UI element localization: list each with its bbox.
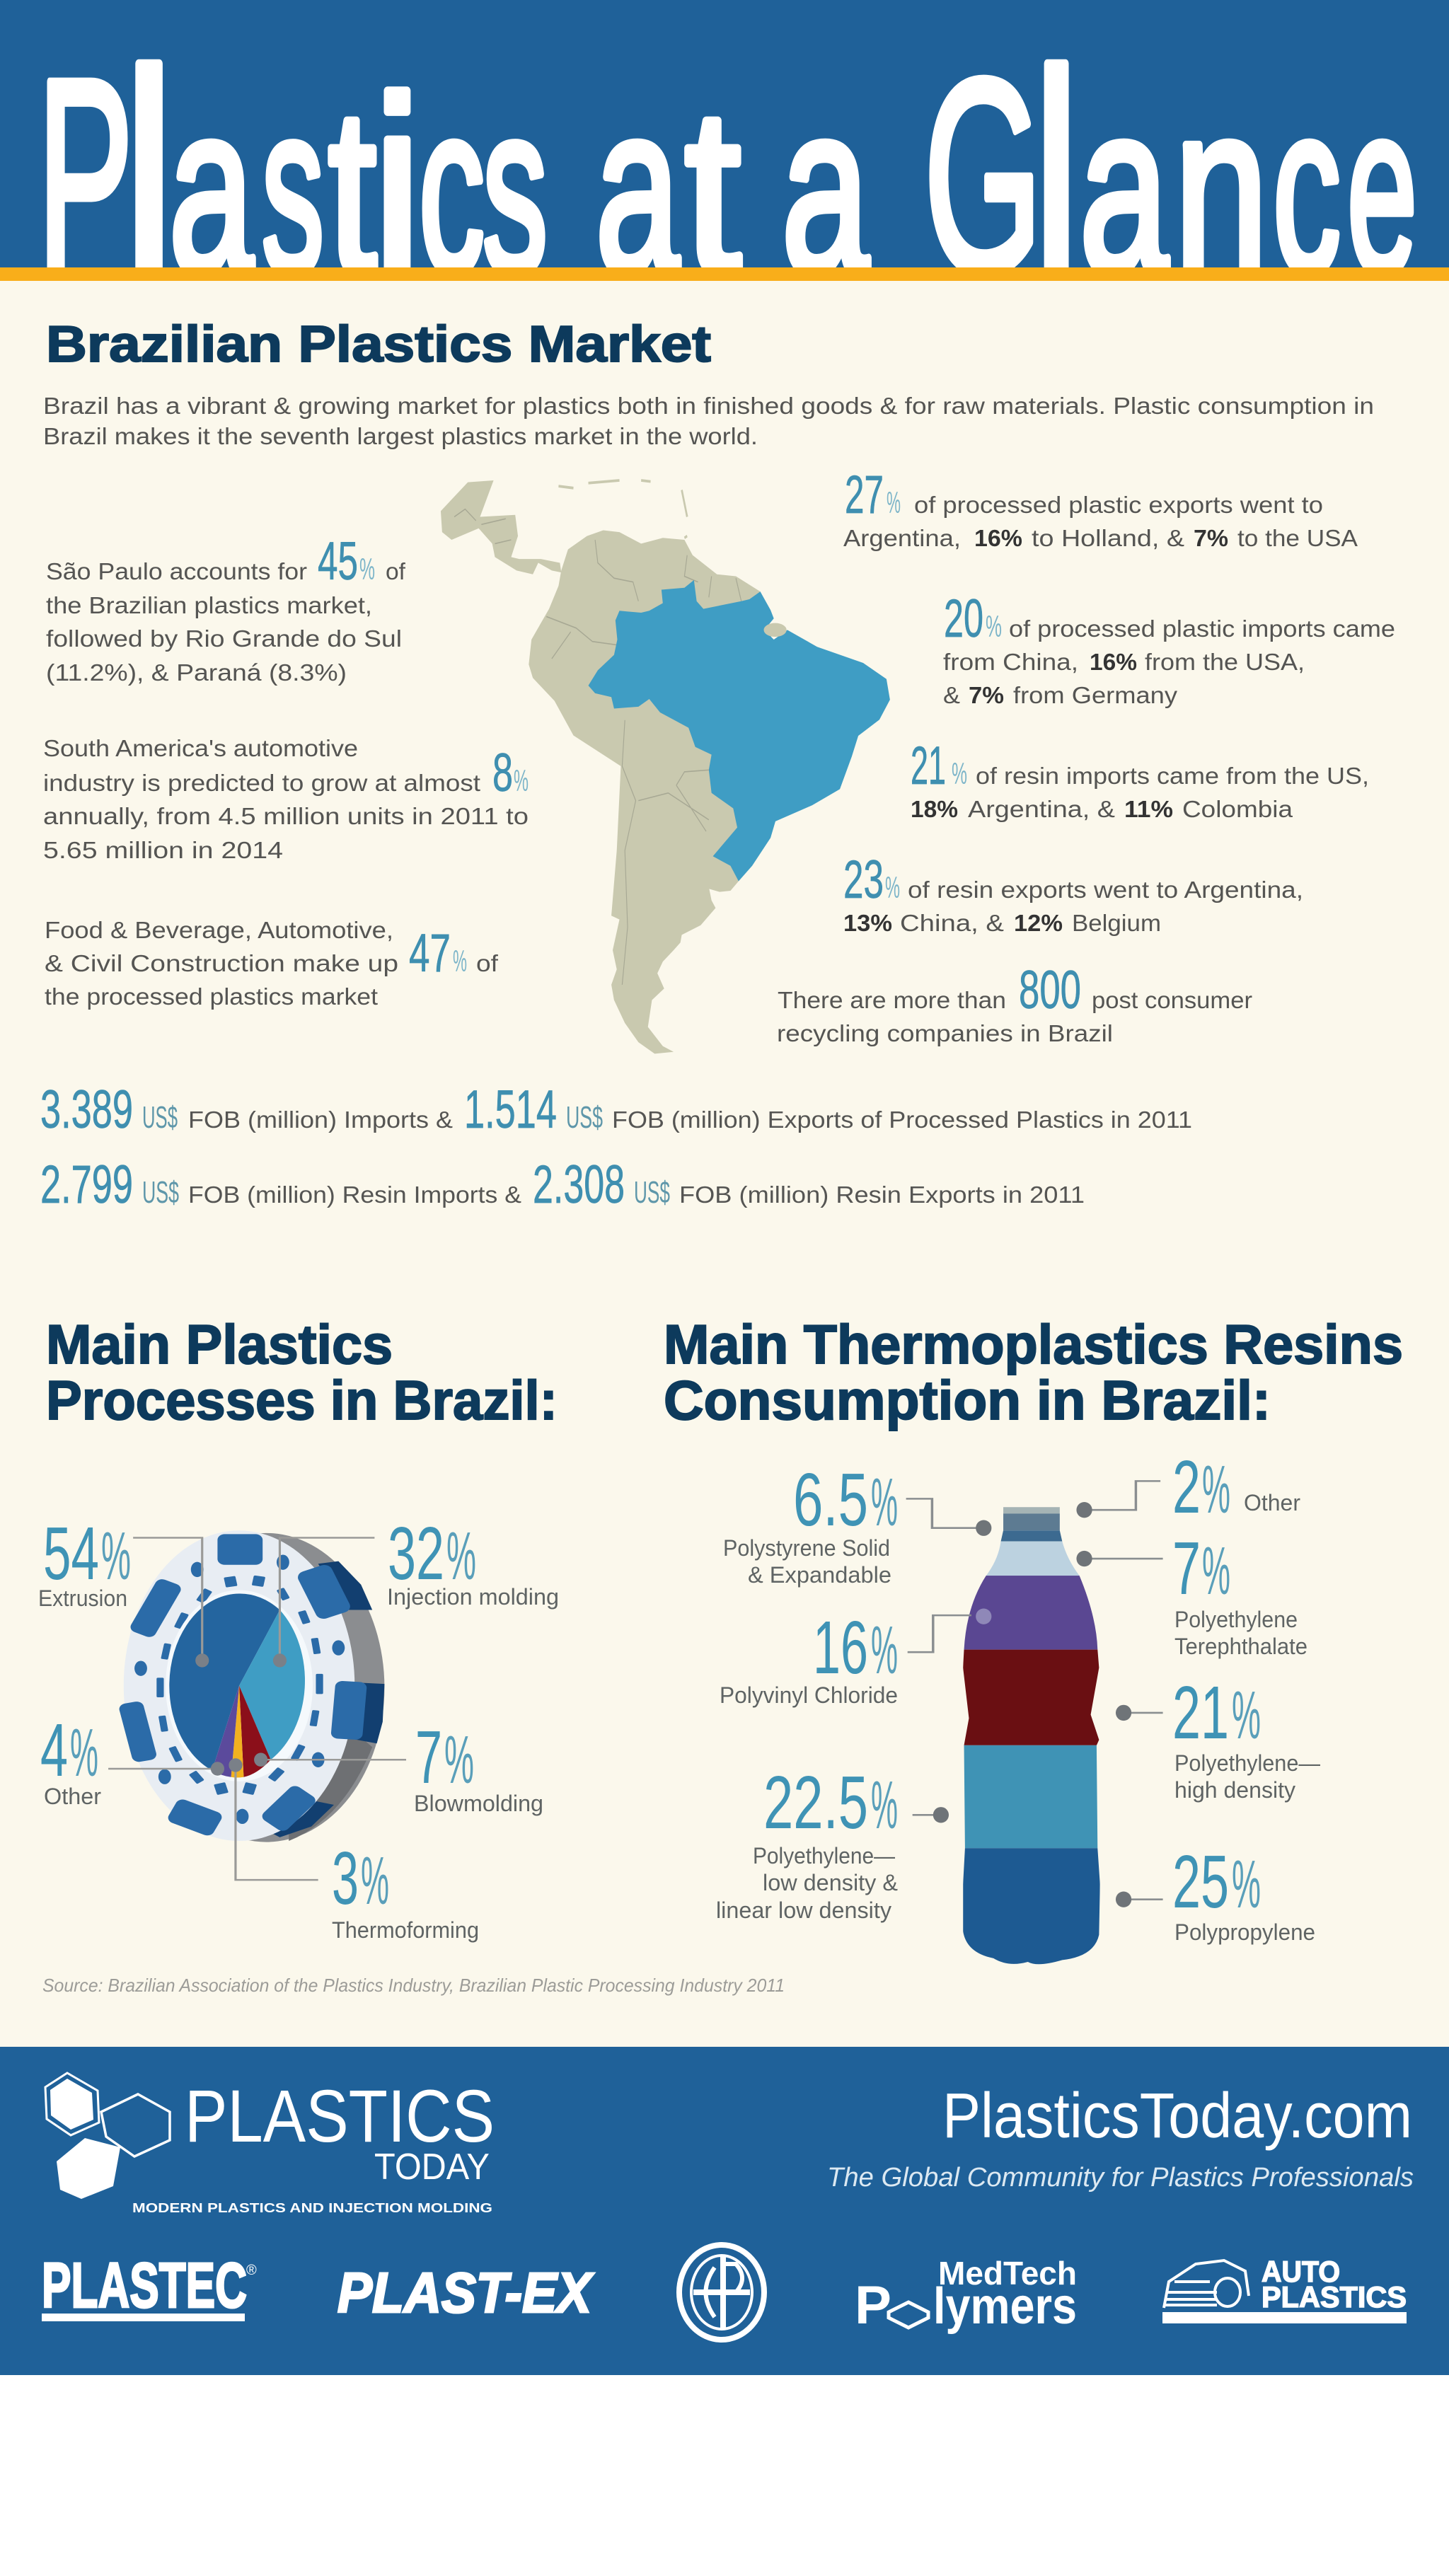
stat: food and beverage 47%: & Civil Construction make up — [45, 950, 398, 976]
logo: MedTech Polymers: lymers — [933, 2278, 1077, 2335]
chip dots — [134, 1554, 345, 1824]
label: 25% polypropylene: Polypropylene — [1174, 1919, 1315, 1945]
chip dashes — [156, 1576, 323, 1795]
label: 3% Thermoforming: % — [361, 1843, 389, 1919]
header band — [0, 0, 1449, 272]
label: 21% HDPE: high density — [1174, 1777, 1295, 1803]
cream page panel — [0, 276, 1449, 2052]
label: 3% Thermoforming — [332, 1837, 479, 1943]
stat: resin imports 21% — [911, 736, 1369, 822]
FOB line: resin: 2.799 — [40, 1155, 133, 1215]
logo: Plastics Today: MODERN PLASTICS AND INJECTION MOLDING — [132, 2201, 492, 2215]
logo hexagons — [45, 2073, 170, 2199]
logo wordmark: PLASTICS — [185, 2075, 495, 2158]
stat: exports 27%: % — [887, 486, 901, 520]
stat: imports 20%: 16% — [1090, 649, 1137, 675]
stat: resin imports 21%: Colombia — [1182, 796, 1293, 822]
chip rim segments — [266, 1561, 384, 1837]
stat: resin imports 21%: 11% — [1124, 796, 1173, 822]
label: 54% Extrusion: Extrusion — [38, 1586, 127, 1611]
heading: Main Thermoplastics Resins Consumption in Brazil: Consumption in Brazil: — [664, 1369, 1271, 1431]
stat: imports 20%: % — [986, 610, 1002, 644]
intro paragraph: Brazil makes it the seventh largest plastics market in the world. — [43, 423, 758, 449]
stat: food and beverage 47%: of — [476, 950, 499, 976]
chip blocks — [118, 1534, 367, 1837]
bottle segment: PET 7% — [986, 1541, 1080, 1576]
title: t — [685, 60, 741, 321]
pie: thermoforming 3% — [231, 1686, 243, 1777]
stat: food and beverage 47%: Food & Beverage, Automotive, — [45, 917, 393, 943]
label: 7% Blowmolding — [414, 1716, 543, 1816]
FOB line: resin: FOB (million) Resin Imports & — [188, 1182, 521, 1208]
label: 16% polyvinyl chloride: Polyvinyl Chloride — [720, 1682, 898, 1708]
label: 25% polypropylene — [1172, 1840, 1315, 1945]
stat: resin imports 21%: % — [952, 757, 967, 791]
title: n — [1174, 54, 1268, 323]
label: 21% HDPE: 21 — [1172, 1671, 1229, 1755]
title: G — [924, 22, 1042, 330]
logo: MedTech Polymers: P — [855, 2275, 891, 2335]
stat: 800 recycling companies: post consumer — [1092, 987, 1252, 1013]
logo: Auto Plastics: PLASTICS — [1262, 2280, 1407, 2314]
stat: resin imports 21%: 21 — [911, 736, 946, 796]
footer band — [0, 2047, 1449, 2375]
map: borders — [454, 509, 741, 985]
chip rim dark edge — [289, 1726, 372, 1841]
tagline: The Global Community for Plastics Professionals — [827, 2163, 1414, 2193]
title: a — [596, 54, 680, 323]
text: % — [101, 1518, 131, 1594]
logo: Plastics Today — [45, 2073, 495, 2215]
label: 6.5% polystyrene: Polystyrene Solid — [723, 1535, 890, 1561]
pie: injection molding 32% — [239, 1610, 305, 1760]
label: 54% Extrusion: 54 — [43, 1512, 99, 1595]
bottle leader lines — [906, 1481, 1163, 1900]
stat: imports 20%: 20 — [944, 589, 983, 649]
label: 16% polyvinyl chloride: 16 — [813, 1606, 868, 1690]
label: 25% polypropylene: 25 — [1172, 1840, 1229, 1924]
stat: imports 20%: & — [943, 682, 960, 708]
title: l — [1033, 12, 1080, 333]
logo: Plastec: ® — [246, 2263, 257, 2278]
stat: Sao Paulo 45%: of — [386, 558, 406, 584]
stat: automotive 8%: South America's automotive — [43, 735, 358, 761]
bottle cap — [1003, 1507, 1060, 1514]
bottle segment: HDPE 21% — [963, 1650, 1099, 1745]
stat: 800 recycling companies: recycling companies in Brazil — [777, 1020, 1113, 1046]
stat: resin exports 23%: % — [885, 871, 900, 905]
label: 4% Other — [40, 1709, 101, 1809]
title: a — [169, 54, 254, 323]
intro paragraph — [43, 393, 1374, 449]
heading: Brazilian Plastics Market: Brazilian Plastics Market — [46, 316, 711, 373]
title: a — [782, 54, 870, 323]
stat: automotive 8% — [43, 735, 529, 863]
title: i — [373, 45, 422, 325]
label: 2% other: 2 — [1172, 1445, 1201, 1529]
stat: imports 20%: from Germany — [1013, 682, 1178, 708]
text: % — [871, 1612, 898, 1688]
logo: Plastec: PLASTEC — [42, 2251, 247, 2321]
leader lines — [108, 1537, 406, 1880]
bottle leader dots — [933, 1502, 1131, 1907]
title: P — [37, 22, 133, 330]
label: 32% Injection molding: 32 — [388, 1512, 444, 1595]
stat: resin imports 21%: Argentina, & — [968, 796, 1115, 822]
stat: Sao Paulo 45%: % — [359, 553, 375, 587]
heading: Main Thermoplastics Resins Consumption in Brazil — [664, 1313, 1403, 1431]
logo: Plastics Today: TODAY — [374, 2147, 490, 2188]
intro paragraph: Brazil has a vibrant & growing market for plastics both in finished goods & for raw materials. Plastic consumption in — [43, 393, 1374, 419]
title: s — [483, 54, 548, 323]
FOB line: resin: US$ — [634, 1175, 670, 1210]
stat: Sao Paulo 45%: the Brazilian plastics market, — [46, 592, 372, 618]
label: 7% Blowmolding: % — [444, 1722, 474, 1798]
stat: exports 27%: 7% — [1194, 525, 1228, 551]
stat: food and beverage 47%: 47 — [409, 923, 451, 983]
FOB line: processed plastics: 3.389 — [40, 1080, 133, 1140]
FOB line: resin — [40, 1155, 1085, 1215]
label: 7% PET: 7 — [1172, 1527, 1201, 1610]
label: 32% Injection molding: Injection molding — [387, 1584, 559, 1610]
stat: resin exports 23%: Belgium — [1072, 910, 1161, 936]
label: 2% other: % — [1202, 1452, 1230, 1527]
text: % — [871, 1767, 898, 1843]
stat: resin exports 23% — [843, 850, 1303, 936]
label: 16% polyvinyl chloride — [720, 1606, 898, 1708]
heading: Main Plastics Processes in Brazil: Processes in Brazil: — [46, 1369, 558, 1431]
stat: Sao Paulo 45% — [46, 531, 406, 686]
FOB line: resin: US$ — [142, 1175, 179, 1210]
label: 4% Other: % — [70, 1715, 98, 1791]
stat: imports 20%: 7% — [969, 682, 1004, 708]
stat: automotive 8%: 8 — [492, 743, 513, 803]
title: c — [419, 54, 485, 323]
orange rule — [0, 267, 1449, 281]
label: 32% Injection molding: % — [446, 1518, 476, 1594]
stat: imports 20% — [943, 589, 1395, 708]
FOB line: processed plastics: FOB (million) Imports & — [188, 1107, 453, 1133]
label: 6.5% polystyrene — [723, 1458, 898, 1588]
stat: imports 20%: from China, — [943, 649, 1078, 675]
bottle segment: polyvinyl chloride 16% — [964, 1576, 1098, 1650]
stat: exports 27%: 27 — [845, 465, 884, 525]
map: Brazil — [589, 580, 890, 881]
stat: imports 20%: of processed plastic imports came — [1009, 616, 1395, 642]
label: 7% PET: Polyethylene — [1174, 1607, 1298, 1632]
FOB line: resin: 2.308 — [533, 1155, 625, 1215]
stat: Sao Paulo 45%: followed by Rio Grande do Sul — [46, 625, 402, 652]
stat: automotive 8%: % — [514, 764, 529, 798]
chart: poker-chip pie of processes — [108, 1530, 406, 1880]
label: 7% Blowmolding: Blowmolding — [414, 1791, 543, 1816]
stat: automotive 8%: annually, from 4.5 million units in 2011 to — [43, 803, 529, 829]
label: 22.5% LDPE — [716, 1761, 898, 1923]
label: 7% PET: Terephthalate — [1174, 1634, 1307, 1659]
label: 4% Other: 4 — [40, 1709, 68, 1792]
stat: Sao Paulo 45%: (11.2%), & Paraná (8.3%) — [46, 659, 347, 686]
leader dots — [195, 1653, 287, 1776]
label: 22.5% LDPE: low density & — [763, 1870, 898, 1895]
stat: resin exports 23%: China, & — [900, 910, 1004, 936]
map: Marajo island — [764, 623, 787, 637]
stat: resin exports 23%: 13% — [843, 910, 892, 936]
chip face — [124, 1530, 354, 1841]
label: 21% HDPE: % — [1232, 1677, 1261, 1753]
text: % — [871, 1465, 898, 1540]
stat: resin exports 23%: 23 — [843, 850, 884, 910]
bottle segment: polypropylene 25% — [963, 1848, 1100, 1964]
title: a — [1080, 54, 1169, 323]
FOB line: processed plastics: US$ — [566, 1100, 603, 1135]
label: 2% other: Other — [1244, 1490, 1300, 1515]
FOB line: processed plastics: US$ — [142, 1100, 178, 1135]
label: 7% PET: % — [1202, 1533, 1230, 1609]
stat: automotive 8%: 5.65 million in 2014 — [43, 837, 283, 863]
label: 22.5% LDPE: linear low density — [716, 1898, 891, 1923]
logo: MedTech Polymers: MedTech — [938, 2255, 1077, 2292]
stat: exports 27%: Argentina, — [843, 525, 961, 551]
title — [37, 12, 1417, 333]
stat: food and beverage 47%: the processed plastics market — [45, 983, 378, 1010]
label: 22.5% LDPE: 22.5 — [763, 1761, 868, 1844]
logo: Auto Plastics — [1162, 2255, 1407, 2323]
source note: Source: Brazilian Association of the Plastics Industry, Brazilian Plastic Processing Industry 2011 — [42, 1975, 785, 1996]
map: South America with Brazil highlighted — [441, 480, 890, 1053]
pie: blowmolding 7% — [239, 1686, 271, 1777]
hexagon letter o — [889, 2302, 928, 2328]
stat: resin imports 21%: 18% — [911, 796, 958, 822]
stat: Sao Paulo 45%: São Paulo accounts for — [46, 558, 307, 584]
pie halo — [166, 1590, 313, 1781]
auto plastics wordmark: AUTO — [1262, 2255, 1340, 2288]
stat: food and beverage 47%: % — [453, 945, 467, 978]
heading: Main Plastics Processes in Brazil — [46, 1313, 558, 1431]
stat: exports 27% — [843, 465, 1358, 551]
chip rim — [148, 1533, 384, 1842]
heading: Main Thermoplastics Resins Consumption in Brazil: Main Thermoplastics Resins — [664, 1313, 1403, 1375]
map: South America — [529, 530, 777, 1053]
label: 6.5% polystyrene: 6.5 — [793, 1458, 868, 1542]
chart: plastic bottle of resins — [906, 1481, 1163, 1968]
label: 4% Other: Other — [44, 1784, 101, 1809]
title: c — [1273, 54, 1341, 323]
stat: resin exports 23%: 12% — [1014, 910, 1063, 936]
logo: MedTech Polymers — [855, 2255, 1077, 2335]
label: 3% Thermoforming: 3 — [332, 1837, 359, 1920]
map: Caribbean islands — [558, 480, 687, 538]
FOB line: processed plastics: FOB (million) Exports of Processed Plastics in 2011 — [612, 1107, 1192, 1133]
heading: Main Plastics Processes in Brazil: Main Plastics — [46, 1313, 393, 1375]
stat: automotive 8%: industry is predicted to grow at almost — [43, 770, 480, 796]
bottle PVC dot — [976, 1608, 991, 1624]
bottle segment: LDPE 22.5% — [964, 1745, 1098, 1848]
label: 22.5% LDPE: Polyethylene— — [753, 1843, 895, 1869]
stat: exports 27%: 16% — [974, 525, 1022, 551]
car icon — [1164, 2260, 1249, 2308]
FOB line: processed plastics: 1.514 — [464, 1080, 557, 1140]
stat: exports 27%: to the USA — [1237, 525, 1358, 551]
title: s — [262, 54, 324, 323]
label: 21% HDPE: Polyethylene— — [1174, 1750, 1320, 1776]
label: 7% Blowmolding: 7 — [415, 1716, 442, 1799]
stat: resin imports 21%: of resin imports came from the US, — [976, 763, 1369, 789]
stat: imports 20%: from the USA, — [1145, 649, 1305, 675]
pie: extrusion 54% — [169, 1594, 279, 1771]
stat: food and beverage 47% — [45, 917, 499, 1010]
stat: 800 recycling companies: There are more than — [778, 987, 1006, 1013]
label: 21% HDPE — [1172, 1671, 1320, 1803]
title: t — [328, 60, 377, 321]
logo: circular emblem — [679, 2245, 764, 2340]
stat: exports 27%: to Holland, & — [1032, 525, 1184, 551]
label: 25% polypropylene: % — [1232, 1847, 1261, 1922]
label: 3% Thermoforming: Thermoforming — [332, 1917, 479, 1943]
stat: 800 recycling companies — [777, 960, 1252, 1046]
logo: Plast-Ex: PLAST-EX — [337, 2261, 594, 2324]
stat: 800 recycling companies: 800 — [1019, 960, 1081, 1020]
label: 2% other — [1172, 1445, 1300, 1529]
stat: Sao Paulo 45%: 45 — [318, 531, 358, 591]
map: Central America — [441, 480, 561, 574]
stat: resin exports 23%: of resin exports went to Argentina, — [908, 877, 1303, 903]
pie: other 4% — [212, 1686, 239, 1777]
title: l — [123, 12, 175, 333]
FOB line: resin: FOB (million) Resin Exports in 2011 — [679, 1182, 1085, 1208]
label: 7% PET — [1172, 1527, 1307, 1659]
label: 6.5% polystyrene: & Expandable — [748, 1562, 891, 1588]
FOB line: processed plastics — [40, 1080, 1192, 1140]
stat: exports 27%: of processed plastic exports went to — [914, 492, 1323, 518]
label: 32% Injection molding — [387, 1512, 559, 1610]
